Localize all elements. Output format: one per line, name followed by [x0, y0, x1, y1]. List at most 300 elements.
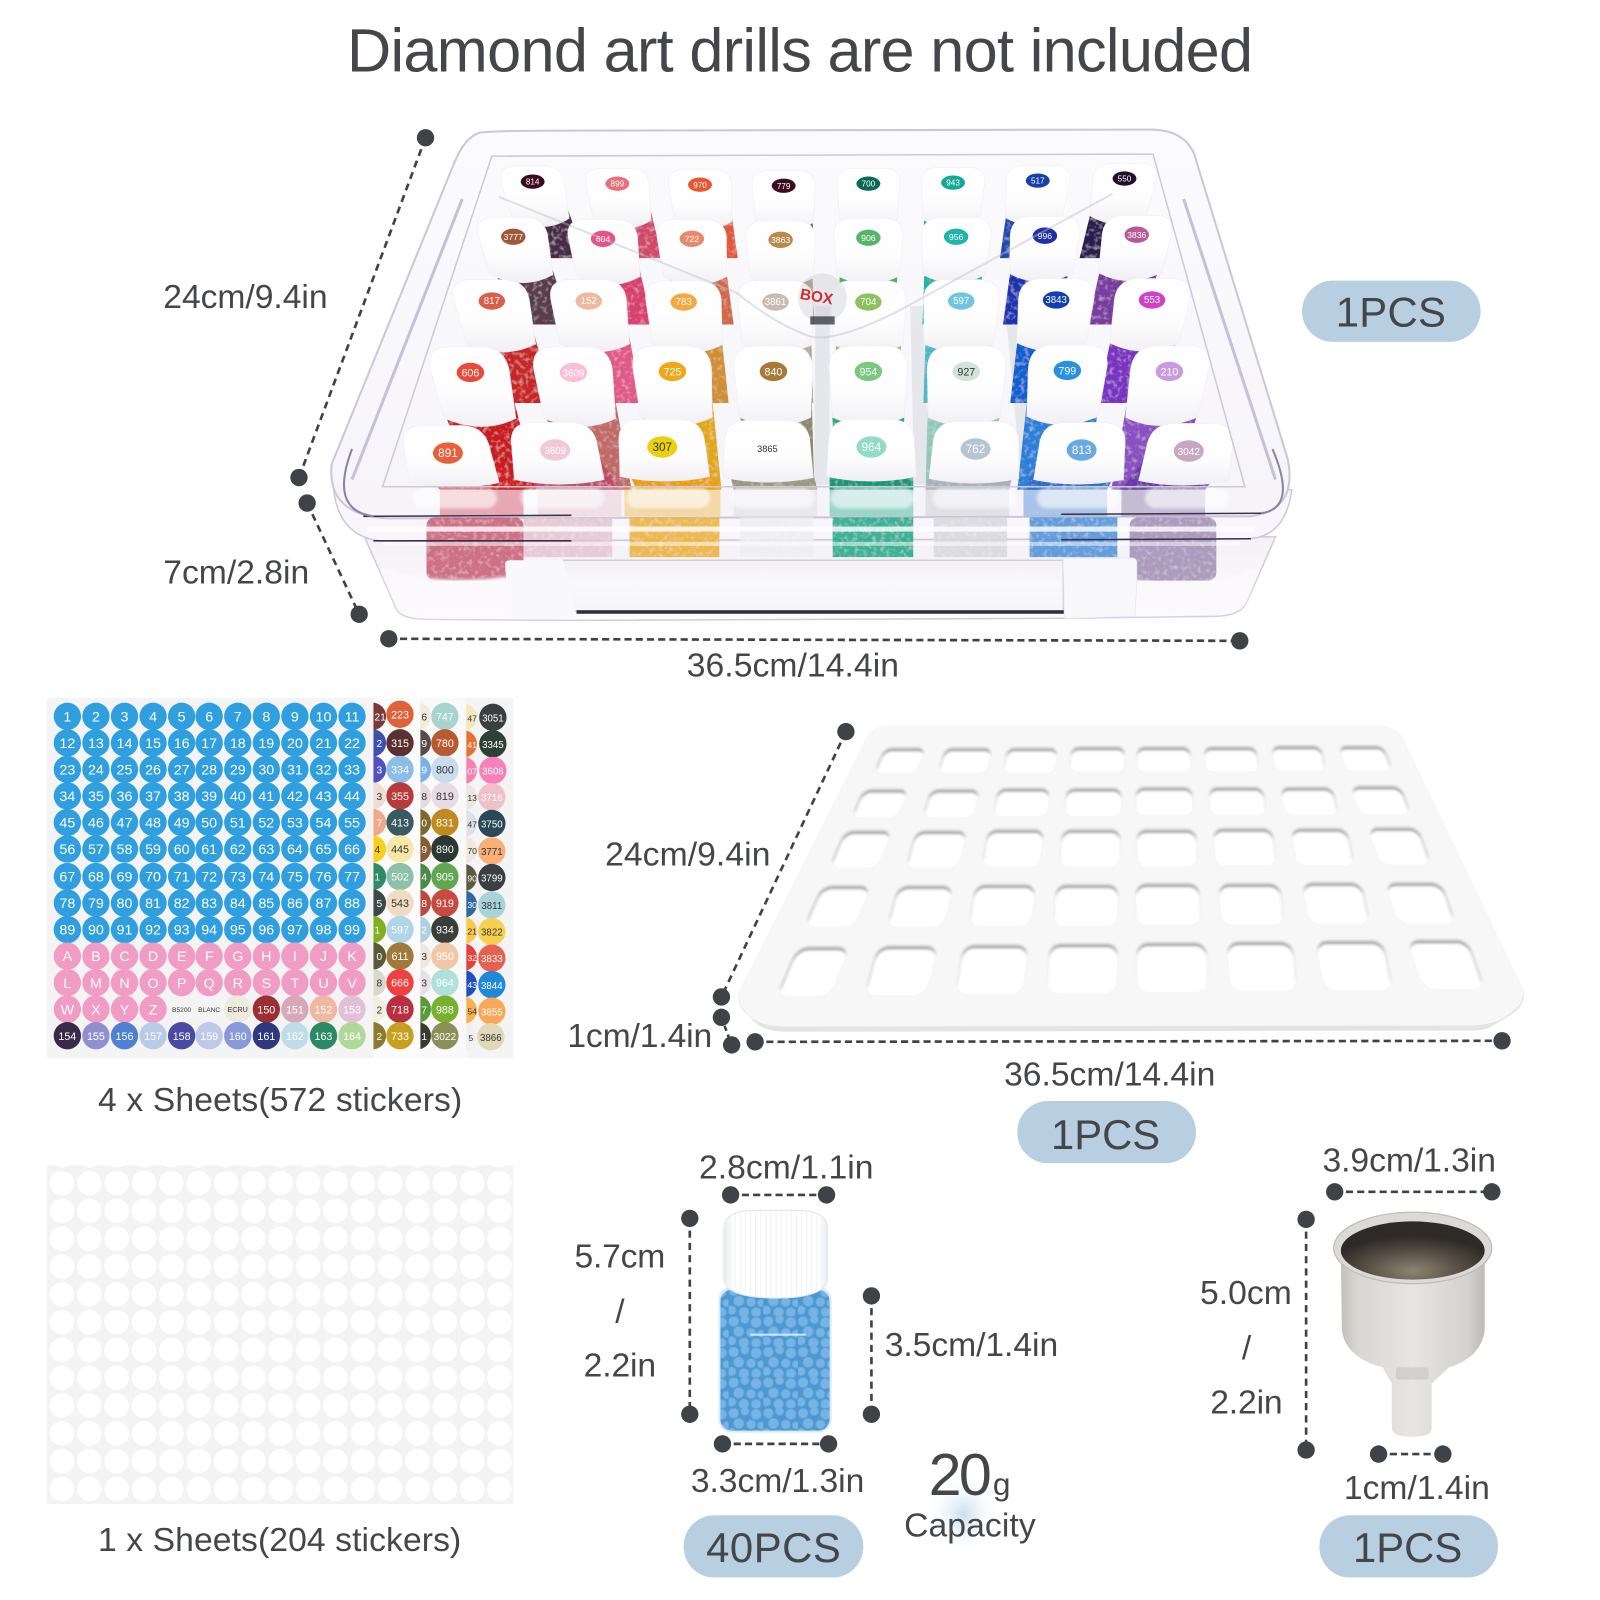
dimension: funnel top width: [1322, 1142, 1501, 1201]
dimension: box width: 36.5cm/14.4in: [687, 648, 899, 685]
cap labels, row 2: 3836: [1127, 230, 1147, 240]
full stickers, second sheet: 611: [391, 951, 409, 963]
dimension: funnel top width: 3.9cm/1.3in: [1322, 1142, 1496, 1179]
blue number stickers: 96: [258, 923, 274, 939]
full stickers, third sheet: 800: [436, 764, 454, 776]
cap labels, row 1: 517: [1031, 177, 1045, 186]
cap labels, row 5: [433, 436, 1204, 464]
full stickers, second sheet: 733: [391, 1031, 409, 1043]
blue number stickers: 51: [230, 816, 246, 832]
cap labels, row 3: 704: [860, 297, 877, 308]
cap labels, row 5: 964: [862, 441, 882, 454]
pink letter stickers: W: [61, 1002, 75, 1018]
blue number stickers: 29: [230, 762, 246, 778]
funnel interior: [1341, 1221, 1485, 1280]
cap labels, row 1: 550: [1118, 175, 1132, 184]
bottle cap side shading: [724, 1210, 828, 1298]
special and coloured stickers on first sheet: 164: [343, 1031, 361, 1043]
blue number stickers: 2: [92, 709, 100, 725]
blue number stickers: 5: [178, 709, 186, 725]
blue number stickers: 19: [258, 736, 274, 752]
full stickers, second sheet: 445: [391, 844, 409, 856]
blue number stickers: 98: [316, 923, 331, 939]
cut stickers, third sheet: 6: [421, 712, 427, 723]
blue number stickers: 34: [59, 789, 75, 805]
blue number stickers: 63: [258, 842, 274, 858]
full stickers, third sheet: 3022: [434, 1032, 457, 1043]
blue number stickers: 30: [258, 762, 274, 778]
dimension: funnel height: 5.0cm: [1200, 1275, 1292, 1312]
blue number stickers: 23: [59, 762, 75, 778]
blue number stickers: 55: [344, 816, 360, 832]
blue number stickers: 80: [117, 896, 132, 912]
cut stickers, second sheet: [373, 702, 386, 1050]
blue number stickers: 65: [316, 842, 331, 858]
cut stickers, fourth sheet: 90: [467, 874, 477, 884]
blue number stickers: 59: [145, 842, 161, 858]
dimension: bottle body width: 3.3cm/1.3in: [691, 1463, 864, 1500]
bottle caps, row 1: [498, 163, 1159, 231]
foam holes: [777, 746, 1484, 996]
cut stickers, third sheet: 4: [421, 873, 427, 884]
blue number stickers: 92: [145, 923, 161, 939]
dimension: funnel height: [1200, 1211, 1315, 1459]
blue number stickers: 39: [201, 789, 217, 805]
blue number stickers: 40: [230, 789, 246, 805]
cut stickers, fourth sheet: 43: [467, 980, 477, 990]
pink letter stickers: F: [205, 949, 214, 965]
blue number stickers: 50: [201, 816, 217, 832]
full stickers, third sheet: 950: [436, 951, 454, 963]
full stickers, second sheet: 315: [391, 738, 409, 750]
blue number stickers: 6: [205, 709, 213, 725]
blue number stickers: 43: [316, 789, 331, 805]
cut stickers, second sheet: 1: [374, 926, 380, 937]
glass gaps between bottles: [814, 306, 1035, 485]
cut stickers, fourth sheet: 47: [467, 713, 477, 723]
pink letter stickers: A: [63, 949, 73, 965]
dimension: funnel spout width: [1344, 1445, 1490, 1507]
icon: drill bottle: [718, 1210, 832, 1433]
full stickers, third sheet: 747: [436, 711, 454, 723]
badge: foam quantity: 1PCS: [1051, 1111, 1160, 1158]
full stickers, third sheet: 988: [436, 1004, 454, 1016]
cap labels, row 1: 970: [693, 181, 707, 190]
cut stickers, second sheet: 7: [377, 819, 383, 830]
dimension: bottle body width: [691, 1435, 864, 1500]
dimension: box height: 7cm/2.8in: [163, 555, 309, 592]
full stickers, second sheet: 718: [391, 1004, 409, 1016]
blue number stickers: 25: [117, 762, 132, 778]
cap labels, row 3: 817: [484, 296, 500, 307]
dimension: bottle cap width: 2.8cm/1.1in: [699, 1150, 873, 1187]
special and coloured stickers on first sheet: 155: [87, 1031, 105, 1043]
bottle beads: [720, 1290, 830, 1431]
cap labels, row 3: 3861: [765, 297, 786, 308]
full stickers, fourth sheet: 3051: [482, 713, 504, 724]
cap labels, row 1: 779: [777, 182, 791, 191]
blue number stickers: 77: [344, 870, 360, 886]
special and coloured stickers on first sheet: B5200: [172, 1007, 192, 1014]
blue number stickers: 62: [230, 842, 246, 858]
blue number stickers: 61: [201, 842, 217, 858]
handle plate: [563, 560, 1063, 611]
pink letter stickers: B: [91, 949, 101, 965]
dimension: box height: [163, 494, 368, 623]
blue number stickers: 33: [344, 762, 360, 778]
dimension: bottle height: 5.7cm: [574, 1238, 665, 1275]
full stickers, fourth sheet: 3750: [481, 820, 503, 831]
cap labels, row 1: 899: [611, 180, 625, 189]
cap labels, row 1: 943: [946, 179, 960, 188]
blue number stickers: 84: [230, 896, 246, 912]
full stickers, third sheet: 890: [436, 844, 454, 856]
full stickers, second sheet: 413: [391, 818, 409, 830]
cap labels, row 5: 307: [652, 441, 672, 454]
dimension: bottle cap width: [699, 1150, 873, 1204]
panel: numbered sticker sheets: [47, 698, 513, 1058]
full stickers, second sheet: [386, 701, 414, 1049]
blue number stickers: 35: [88, 789, 104, 805]
cap labels, row 5: 3042: [1177, 447, 1200, 458]
special and coloured stickers on first sheet: [54, 996, 366, 1049]
cut stickers, third sheet: 9: [421, 845, 427, 856]
blue number stickers: 68: [88, 870, 104, 886]
pink letter stickers: L: [63, 976, 71, 992]
lid rim corners: [344, 449, 1283, 516]
cut stickers, third sheet: 1: [421, 1032, 427, 1043]
dimension: box width: [380, 630, 1248, 685]
blue number stickers: 72: [201, 870, 217, 886]
blue number stickers: 11: [345, 709, 360, 725]
pink letter stickers: O: [148, 976, 159, 992]
full stickers, third sheet: 819: [436, 791, 454, 803]
special and coloured stickers on first sheet: 152: [315, 1004, 332, 1016]
full stickers, third sheet: 919: [436, 898, 454, 910]
pink letter stickers: K: [347, 949, 357, 965]
blue number stickers: 60: [174, 842, 190, 858]
foam front thickness: [738, 726, 1524, 1032]
colour reflected in lid front: [440, 488, 1205, 516]
full stickers, second sheet: 502: [391, 872, 409, 884]
blue number stickers: 49: [174, 816, 190, 832]
special and coloured stickers on first sheet: 157: [144, 1031, 162, 1043]
blue number stickers: 95: [230, 923, 246, 939]
cut stickers, fourth sheet: 32: [467, 953, 477, 963]
pink letter stickers: H: [261, 949, 271, 965]
cut stickers, second sheet: 2: [377, 1005, 383, 1016]
blue number stickers: 91: [117, 923, 132, 939]
blue number stickers: 20: [287, 736, 303, 752]
special and coloured stickers on first sheet: BLANC: [198, 1007, 220, 1014]
full stickers, second sheet: 334: [391, 764, 409, 776]
blue number stickers: 32: [316, 762, 331, 778]
bottle caps, row 5: [397, 419, 1239, 487]
full stickers, third sheet: [431, 703, 459, 1049]
cut stickers, fourth sheet: [466, 704, 477, 1041]
drill colour seen through the base: [427, 517, 1216, 581]
cut stickers, fourth sheet: 13: [467, 793, 477, 803]
dimension: bottle height: /: [615, 1293, 625, 1330]
full stickers, second sheet: 597: [391, 925, 409, 937]
special and coloured stickers on first sheet: 162: [286, 1031, 304, 1043]
special and coloured stickers on first sheet: 160: [229, 1031, 247, 1043]
blue number stickers: 58: [117, 842, 132, 858]
blue number stickers: 10: [316, 709, 331, 725]
cap labels, row 2: 906: [861, 233, 876, 243]
lid logo disc: [798, 273, 847, 322]
blue number stickers: 75: [287, 870, 303, 886]
blue number stickers: 56: [59, 842, 75, 858]
special and coloured stickers on first sheet: 163: [315, 1031, 332, 1043]
pink letter stickers: [54, 942, 366, 1023]
blue number stickers: 45: [59, 816, 75, 832]
blue number stickers: 14: [117, 736, 132, 752]
dimension: foam width: 36.5cm/14.4in: [1004, 1057, 1215, 1094]
blue number stickers: 57: [88, 842, 104, 858]
caption: numbered sheets: 4 x Sheets(572 stickers): [98, 1082, 462, 1119]
full stickers, third sheet: 831: [436, 818, 454, 830]
blue number stickers: 70: [145, 870, 161, 886]
pink letter stickers: G: [232, 949, 243, 965]
blue number stickers: 28: [201, 762, 217, 778]
dimension: foam thickness: 1cm/1.4in: [567, 1018, 712, 1055]
dimension: funnel height: /: [1242, 1330, 1252, 1367]
cut stickers, second sheet: 3: [377, 765, 383, 776]
blue number stickers: 52: [258, 816, 274, 832]
cap labels, row 3: 152: [581, 296, 597, 307]
cap labels, row 2: 3863: [771, 235, 790, 245]
lid logo: BOX: [799, 286, 835, 309]
cut stickers, fourth sheet: 30: [467, 900, 477, 910]
cap labels, row 3: [479, 291, 1165, 311]
cap labels, row 3: 783: [676, 297, 692, 308]
cap labels, row 4: 725: [664, 367, 681, 379]
dimension: funnel height: 2.2in: [1210, 1384, 1283, 1421]
cap labels, row 4: 210: [1160, 367, 1178, 379]
special and coloured stickers on first sheet: 159: [200, 1031, 218, 1043]
cut stickers, third sheet: 9: [421, 739, 427, 750]
cut stickers, third sheet: 7: [421, 1005, 427, 1016]
cut stickers, third sheet: 3: [421, 979, 427, 990]
blue number stickers: 21: [316, 736, 331, 752]
blue number stickers: 54: [316, 816, 331, 832]
pink letter stickers: S: [262, 976, 271, 992]
full stickers, fourth sheet: [477, 704, 507, 1050]
blue number stickers: 9: [291, 709, 299, 725]
blue number stickers: 89: [59, 923, 75, 939]
second sheet strip: [373, 698, 420, 1058]
box lid: [331, 130, 1290, 518]
bottle bodies, front row: [406, 456, 1231, 490]
blue number stickers: 79: [88, 896, 104, 912]
full stickers, fourth sheet: 3608: [482, 766, 504, 777]
blue number stickers: 53: [287, 816, 303, 832]
right clip: [1063, 558, 1137, 618]
badge: funnel quantity: 1PCS: [1353, 1524, 1462, 1571]
badge: foam quantity: [1017, 1101, 1196, 1163]
cap labels, row 2: 3777: [504, 232, 523, 242]
blue number stickers: 64: [287, 842, 303, 858]
blue number stickers: 37: [145, 789, 161, 805]
blue number stickers: [54, 703, 366, 943]
blue number stickers: 85: [258, 896, 274, 912]
bottle glass edge: [718, 1287, 832, 1433]
pale cap reflections: [413, 488, 1229, 508]
dimension: foam width: [746, 1032, 1511, 1094]
blue number stickers: 47: [117, 816, 132, 832]
cap labels, row 5: 3865: [757, 444, 778, 454]
cap labels, row 2: 722: [685, 234, 699, 244]
blue number stickers: 69: [117, 870, 132, 886]
bottle bodies, row 4: [433, 378, 1207, 490]
cap labels, row 4: 840: [765, 367, 782, 379]
sheet backing: [47, 698, 513, 1058]
full stickers, fourth sheet: 3855: [481, 1007, 503, 1018]
panel: foam tray: [738, 726, 1524, 1032]
callout: capacity: 20: [929, 1441, 992, 1508]
blue number stickers: 66: [344, 842, 360, 858]
full stickers, fourth sheet: 3799: [481, 874, 503, 885]
lid inner panel: [383, 154, 1245, 487]
funnel body and spout: [1341, 1250, 1485, 1437]
cut stickers, second sheet: 8: [377, 979, 383, 990]
left clip: [505, 560, 577, 618]
full stickers, fourth sheet: 3866: [480, 1033, 502, 1044]
cap labels, row 1: 814: [526, 178, 540, 187]
pink letter stickers: M: [90, 976, 102, 992]
foam top face: [739, 726, 1524, 1027]
base reflection band lower: [383, 542, 1240, 546]
bottle bodies, row 2: [483, 243, 1167, 324]
cut stickers, fourth sheet: 41: [467, 740, 477, 750]
cut stickers, third sheet: 0: [421, 819, 427, 830]
blue number stickers: 13: [88, 736, 104, 752]
funnel collar: [1396, 1367, 1429, 1380]
cap labels, row 4: 3609: [563, 369, 584, 380]
dimension: bottle body height: 3.5cm/1.4in: [885, 1327, 1058, 1364]
blue number stickers: 31: [287, 762, 303, 778]
blue number stickers: 74: [258, 870, 274, 886]
pink letter stickers: E: [177, 949, 186, 965]
pink letter stickers: U: [318, 976, 329, 992]
special and coloured stickers on first sheet: 150: [257, 1004, 275, 1016]
lid side latches: [352, 199, 1276, 480]
cut stickers, second sheet: 5: [377, 899, 383, 910]
cut stickers, fourth sheet: 07: [467, 766, 477, 776]
blue number stickers: 99: [344, 923, 360, 939]
title: Diamond art drills are not included: [347, 16, 1253, 84]
cap labels, row 5: 3609: [544, 446, 566, 457]
dimension: bottle body height: [863, 1287, 1058, 1423]
blue number stickers: 1: [63, 709, 71, 725]
full stickers, fourth sheet: 3844: [481, 981, 503, 992]
cap labels, row 1: [521, 171, 1136, 193]
dimension: box depth: 24cm/9.4in: [163, 279, 328, 316]
fog below left bottle: [380, 567, 577, 618]
pink letter stickers: Z: [149, 1002, 158, 1018]
badge: funnel quantity: [1319, 1515, 1498, 1578]
blue number stickers: 36: [117, 789, 132, 805]
full stickers, second sheet: 355: [391, 791, 409, 803]
blue number stickers: 7: [234, 709, 242, 725]
lid centre mark: [810, 316, 835, 324]
badge: box quantity: 1PCS: [1336, 289, 1446, 336]
cut stickers, third sheet: 9: [421, 765, 427, 776]
blue number stickers: 82: [174, 896, 190, 912]
blue number stickers: 67: [59, 870, 75, 886]
blue number stickers: 88: [344, 896, 360, 912]
cut stickers, second sheet: 2: [377, 739, 383, 750]
cap labels, row 4: [457, 361, 1183, 382]
bottle highlight: [750, 1334, 806, 1336]
blue number stickers: 27: [174, 762, 190, 778]
blue number stickers: 44: [344, 789, 360, 805]
blue number stickers: 42: [287, 789, 303, 805]
special and coloured stickers on first sheet: 158: [173, 1031, 191, 1043]
panel: storage box: [331, 130, 1292, 620]
blue number stickers: 94: [201, 923, 217, 939]
dimension: bottle height: [574, 1210, 698, 1423]
dimension: bottle height: 2.2in: [584, 1348, 656, 1385]
cap labels, row 1: 700: [862, 180, 876, 189]
blue number stickers: 38: [174, 789, 190, 805]
callout: capacity: g: [993, 1466, 1010, 1502]
lid clear sticker outline: [499, 194, 1112, 337]
lid rim dark edges: [363, 513, 1261, 541]
special and coloured stickers on first sheet: ECRU: [228, 1006, 248, 1014]
cap labels, row 5: 762: [966, 443, 985, 456]
dimension: foam depth: 24cm/9.4in: [605, 836, 770, 873]
blue number stickers: 17: [201, 736, 217, 752]
fog below right bottle: [1122, 567, 1259, 616]
blue number stickers: 48: [145, 816, 161, 832]
pink letter stickers: X: [91, 1002, 101, 1018]
blue number stickers: 3: [121, 709, 129, 725]
bottle caps, row 4: [426, 345, 1213, 427]
blue number stickers: 97: [287, 923, 303, 939]
badge: bottle quantity: [684, 1515, 863, 1578]
cut stickers, fourth sheet: 5: [468, 1033, 473, 1043]
blue number stickers: 81: [145, 896, 161, 912]
base reflection band: [367, 527, 1255, 532]
full stickers, third sheet: 905: [436, 872, 454, 884]
blue number stickers: 76: [316, 870, 331, 886]
blue number stickers: 26: [145, 762, 161, 778]
full stickers, fourth sheet: 3833: [481, 954, 503, 965]
blue number stickers: 71: [174, 870, 190, 886]
cut stickers, fourth sheet: 54: [467, 1006, 477, 1016]
blue number stickers: 78: [59, 896, 75, 912]
blue number stickers: 24: [88, 762, 104, 778]
blue number stickers: 18: [230, 736, 246, 752]
full stickers, second sheet: 223: [391, 709, 409, 721]
full stickers, fourth sheet: 3811: [481, 901, 502, 912]
cut stickers, second sheet: 0: [377, 952, 383, 963]
cap labels, row 4: 799: [1058, 365, 1076, 377]
blue number stickers: 90: [88, 923, 104, 939]
pink letter stickers: V: [347, 976, 357, 992]
blue number stickers: 15: [145, 736, 161, 752]
special and coloured stickers on first sheet: 161: [257, 1031, 275, 1043]
bottle caps, row 3: [450, 279, 1194, 353]
handle bottom shadow: [577, 610, 1064, 614]
box base: [365, 537, 1276, 620]
pink letter stickers: J: [320, 949, 327, 965]
special and coloured stickers on first sheet: 154: [58, 1031, 76, 1043]
bottle cap: [724, 1210, 828, 1298]
cut stickers, second sheet: 21: [374, 712, 386, 723]
